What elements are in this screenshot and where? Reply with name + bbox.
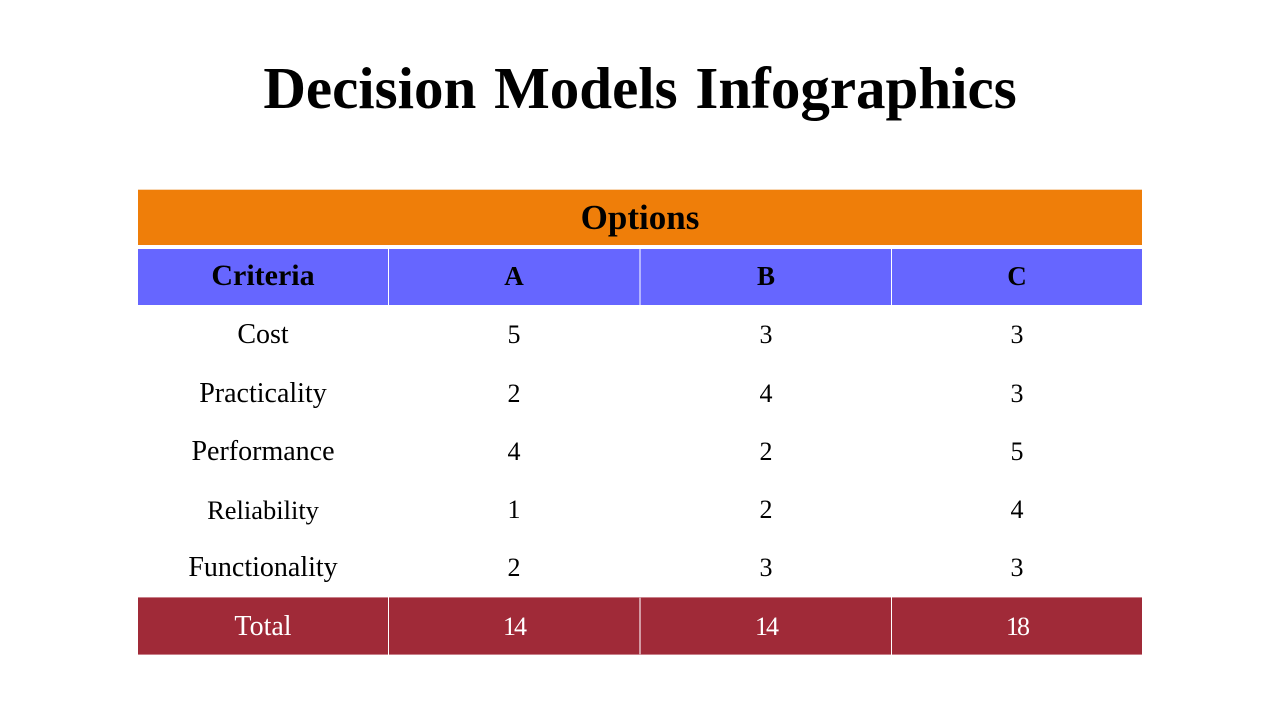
- row: reliability: [207, 494, 1024, 524]
- row: cost: 3: [760, 320, 772, 349]
- row: practicality: 3: [1010, 379, 1024, 408]
- total C cell: [892, 597, 1142, 655]
- row: functionality: 2: [508, 553, 520, 582]
- row: functionality: Functionality: [188, 552, 338, 583]
- row: practicality: [199, 378, 1024, 409]
- row: reliability: Reliability: [207, 494, 319, 524]
- row: cost: Cost: [237, 319, 289, 350]
- option C header cell: [892, 249, 1142, 305]
- total B cell: [641, 597, 891, 655]
- row: functionality: 3: [760, 553, 772, 582]
- total A cell: 14: [503, 612, 525, 641]
- total C cell: 18: [1006, 612, 1028, 641]
- decision table: [138, 189, 1142, 655]
- row: cost: [237, 319, 1024, 350]
- option A header cell: [389, 249, 639, 305]
- total A cell: [389, 597, 639, 655]
- criteria header cell: [138, 249, 388, 305]
- total B cell: 14: [755, 612, 777, 641]
- row: performance: 5: [1010, 437, 1024, 466]
- row: reliability: 2: [760, 495, 772, 524]
- row: practicality: Practicality: [199, 378, 327, 409]
- row: performance: [191, 436, 1024, 467]
- row: reliability: 1: [508, 495, 520, 524]
- title: Decision Models Infographics: [263, 54, 1017, 120]
- row: reliability: 4: [1010, 495, 1024, 524]
- row: practicality: 4: [760, 379, 772, 408]
- row: practicality: 2: [508, 379, 520, 408]
- row: functionality: 3: [1010, 553, 1024, 582]
- option A header cell: A: [504, 261, 524, 291]
- option B header cell: [641, 249, 891, 305]
- row: functionality: [188, 552, 1024, 583]
- options header: [138, 189, 1142, 245]
- criteria header cell: Criteria: [211, 258, 315, 292]
- row: performance: 4: [508, 437, 520, 466]
- row: cost: 5: [508, 320, 520, 349]
- option C header cell: C: [1007, 261, 1027, 291]
- row: performance: 2: [760, 437, 772, 466]
- options header: Options: [581, 198, 699, 237]
- row: performance: Performance: [191, 436, 335, 467]
- total label cell: [138, 597, 388, 655]
- row: cost: 3: [1010, 320, 1024, 349]
- total label cell: Total: [234, 611, 292, 642]
- option B header cell: B: [757, 261, 775, 291]
